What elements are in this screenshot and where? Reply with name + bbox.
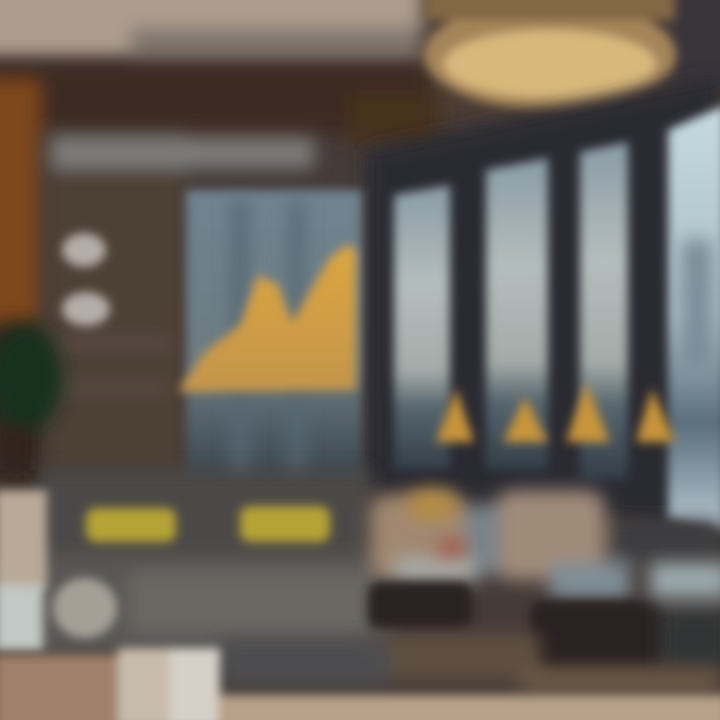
yellow pills: [86, 506, 330, 542]
dashboard white markers: [62, 233, 110, 326]
left dashboard panel: [46, 130, 314, 470]
plant: [0, 326, 62, 470]
chart vertical stripes: [232, 200, 304, 480]
yellow pendant accents: [436, 382, 675, 442]
window wall frame: [365, 75, 720, 530]
ceiling: [0, 0, 720, 120]
sofa: [370, 490, 720, 600]
chandelier: [424, 0, 676, 110]
yellow area chart: [180, 244, 356, 392]
dark side chairs: [368, 582, 665, 668]
lower dark console: [0, 470, 390, 655]
wood wall upper: [0, 62, 440, 480]
right glass table: [650, 562, 720, 670]
chart panel: [186, 190, 362, 485]
foreground table: [0, 648, 720, 720]
floor: [220, 634, 720, 694]
distant tower: [682, 240, 712, 370]
windows with skyline: [394, 105, 720, 530]
cushion accents: [406, 489, 466, 556]
white objects on left: [0, 490, 117, 650]
